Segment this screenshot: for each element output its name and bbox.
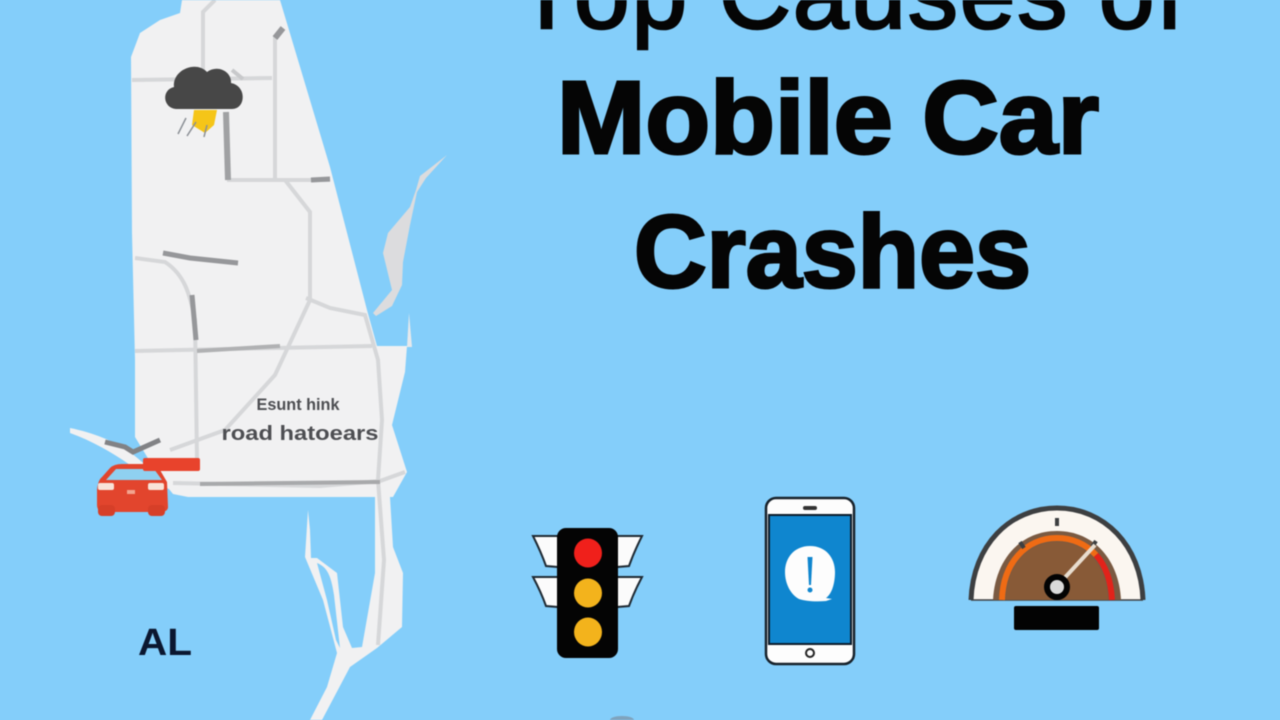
icon: traffic light — [533, 528, 642, 658]
river bank — [407, 313, 412, 347]
icon: red car — [97, 458, 200, 516]
land mass — [131, 0, 407, 497]
icon: speedometer — [971, 508, 1143, 630]
title: Crashes — [634, 194, 1031, 309]
title: Mobile Car — [557, 60, 1099, 175]
state label AL: AL — [138, 622, 192, 664]
western inlet — [70, 428, 175, 492]
map of Mobile area — [70, 0, 447, 720]
icon: smartphone with alert — [766, 498, 854, 664]
map label: Esunt hink — [256, 395, 340, 414]
icon: storm cloud — [165, 67, 243, 137]
road network — [132, 0, 405, 645]
cropped icon top — [610, 716, 634, 720]
map label — [222, 395, 378, 445]
title — [516, 0, 1186, 309]
peninsula channel — [317, 563, 340, 648]
southern peninsula — [305, 497, 403, 720]
river estuary — [373, 155, 447, 316]
darker road segments — [105, 28, 380, 484]
map label: road hatoears — [222, 423, 378, 445]
